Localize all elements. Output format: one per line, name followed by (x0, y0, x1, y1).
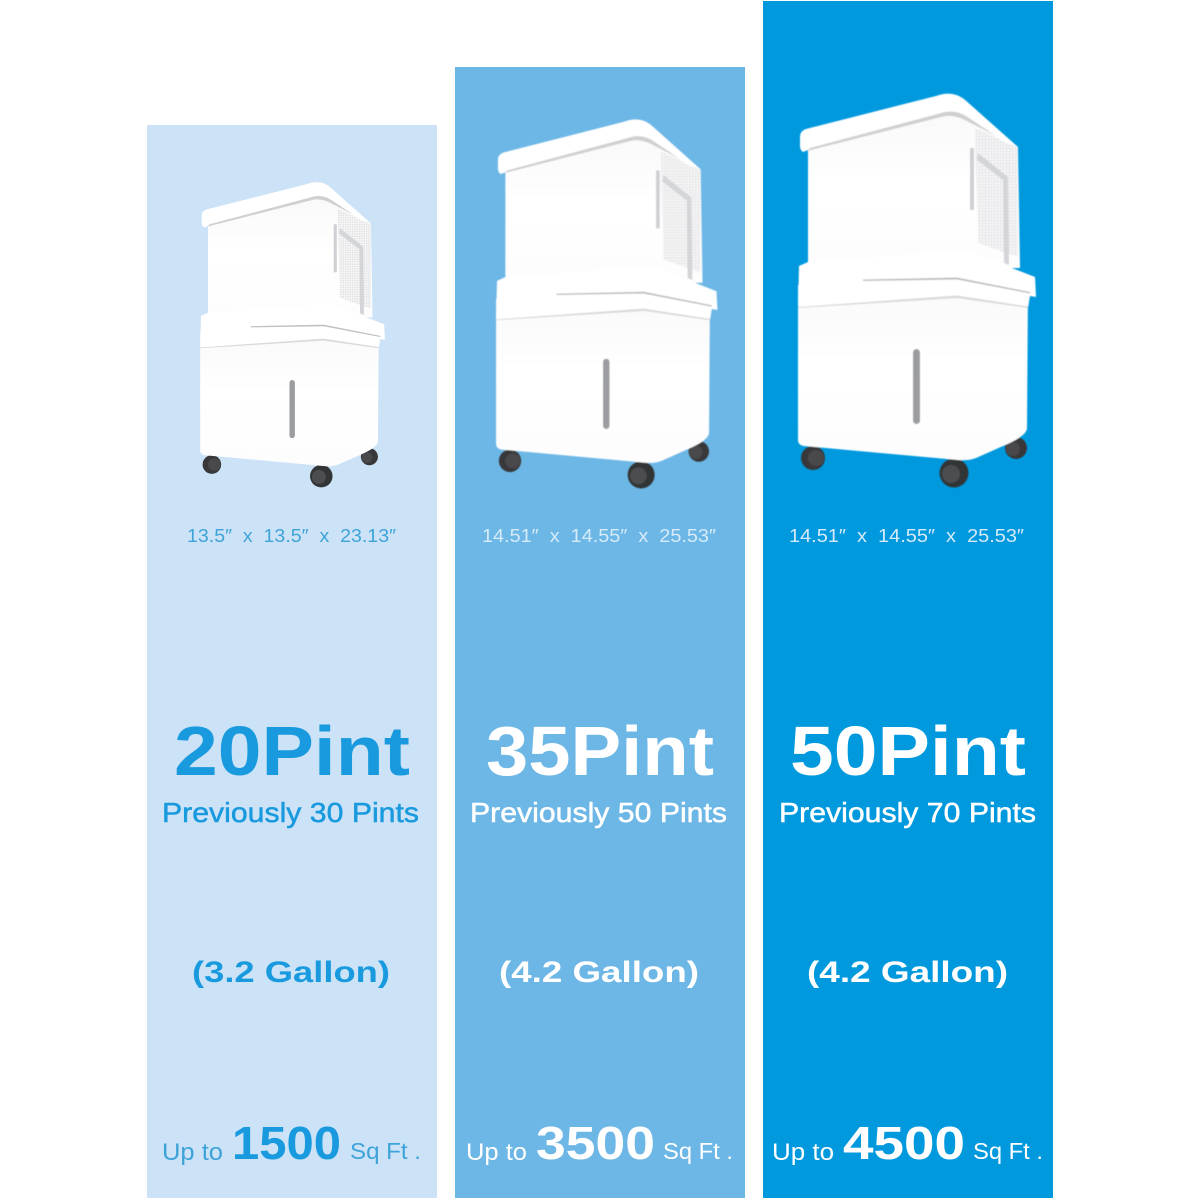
coverage: Up to (162, 1139, 223, 1166)
panel: 35 pint (455, 67, 745, 1198)
previous rating: Previously 30 Pints (162, 797, 419, 828)
dimensions: 14.51″ x 14.55″ x 25.53″ (482, 526, 717, 546)
icon: 20 pint dehumidifier (200, 182, 385, 487)
coverage: 4500 (843, 1117, 965, 1169)
tank size: (3.2 Gallon) (192, 956, 390, 989)
panel: 20 pint (147, 125, 437, 1198)
capacity heading: 50Pint (790, 712, 1026, 790)
coverage (466, 1117, 733, 1169)
icon: 50 pint dehumidifier (798, 94, 1036, 487)
dimensions: 13.5″ x 13.5″ x 23.13″ (187, 526, 397, 546)
capacity heading: 35Pint (486, 712, 714, 790)
coverage: 1500 (232, 1117, 341, 1169)
coverage: Sq Ft . (973, 1138, 1043, 1164)
tank size: (4.2 Gallon) (499, 956, 699, 989)
coverage: Up to (466, 1139, 527, 1166)
capacity heading: 20Pint (174, 712, 410, 790)
panel: 50 pint (763, 1, 1053, 1198)
tank size: (4.2 Gallon) (807, 956, 1008, 989)
previous rating: Previously 50 Pints (470, 797, 727, 828)
coverage: Sq Ft . (350, 1138, 421, 1164)
coverage (162, 1117, 421, 1169)
coverage: Up to (772, 1139, 834, 1166)
icon: 35 pint dehumidifier (496, 119, 717, 488)
previous rating: Previously 70 Pints (779, 797, 1036, 828)
coverage: 3500 (536, 1117, 655, 1169)
coverage: Sq Ft . (663, 1138, 733, 1164)
coverage (772, 1117, 1043, 1169)
dimensions: 14.51″ x 14.55″ x 25.53″ (789, 526, 1025, 546)
